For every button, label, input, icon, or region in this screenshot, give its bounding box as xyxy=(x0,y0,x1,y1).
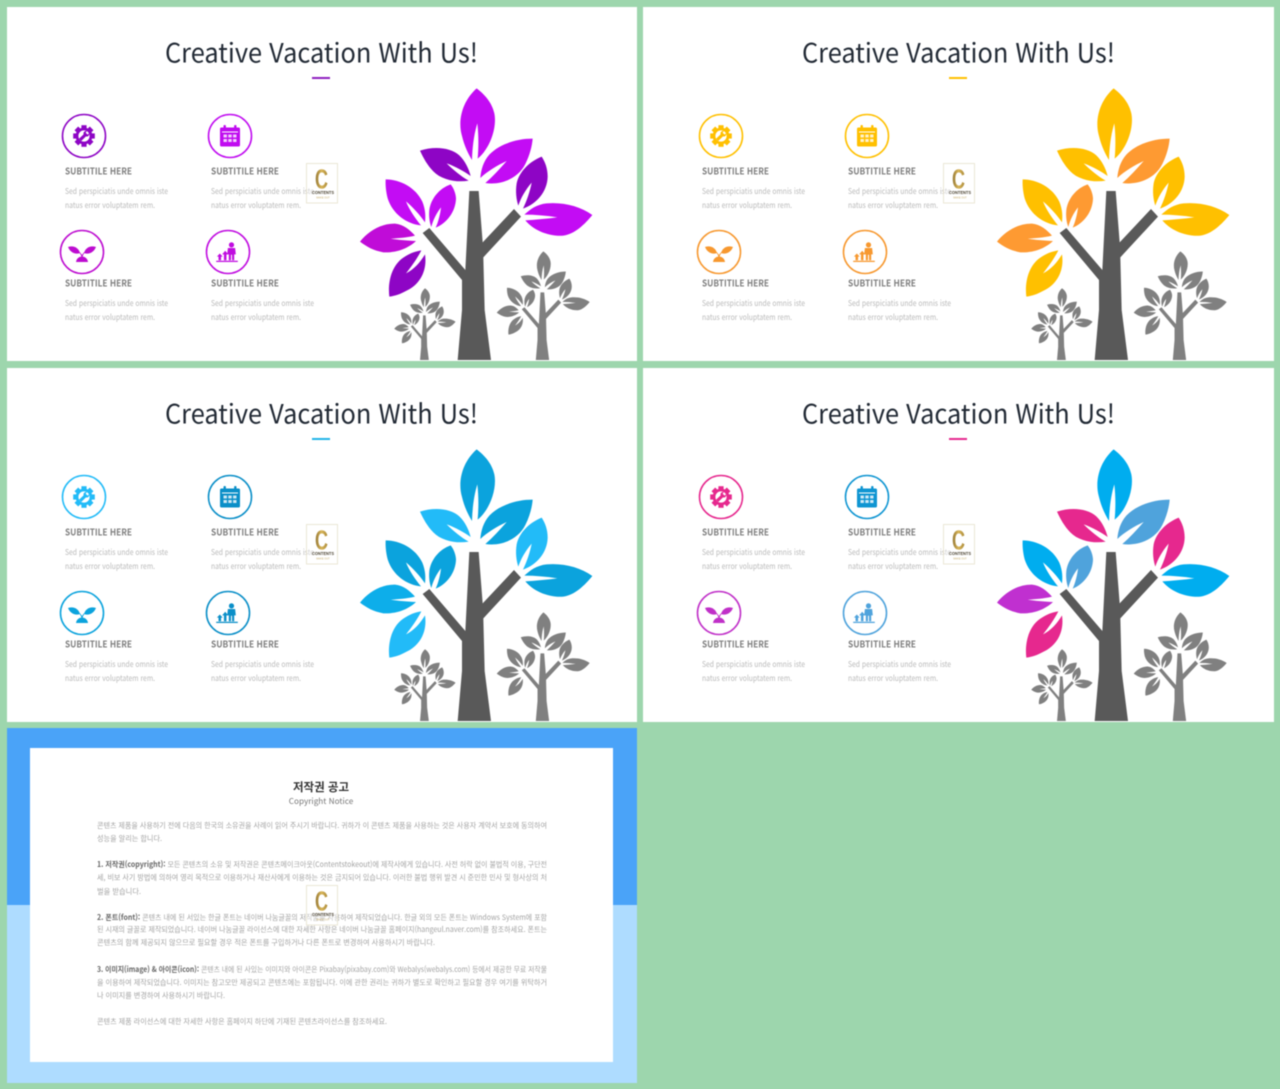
icon: calendar xyxy=(846,114,888,158)
icon: gear xyxy=(700,114,742,158)
subtitle: SUBTITILE HERE xyxy=(65,524,132,538)
notice heading: 저작권 공고 xyxy=(293,779,349,795)
feature: growth xyxy=(844,592,951,684)
description: Sed perspiciatis unde omnis iste xyxy=(702,298,805,309)
description xyxy=(211,298,314,323)
description xyxy=(848,659,951,684)
subtitle: SUBTITILE HERE xyxy=(211,164,279,178)
subtitle: SUBTITILE HERE xyxy=(211,636,279,650)
feature: sprout xyxy=(698,592,805,684)
title: Creative Vacation With Us! xyxy=(802,392,1115,432)
feature: growth xyxy=(206,230,314,323)
icon: growth person xyxy=(844,230,886,274)
subtitle: SUBTITILE HERE xyxy=(848,276,916,290)
title underline xyxy=(312,438,330,440)
description: natus error voluptatem rem. xyxy=(702,561,792,572)
section 2: font xyxy=(97,912,547,948)
subtitle: SUBTITILE HERE xyxy=(848,636,916,650)
description xyxy=(65,298,168,323)
watermark logo xyxy=(944,524,974,564)
feature: calendar xyxy=(846,114,951,211)
panel: purple slide xyxy=(7,7,637,361)
section 3: image and icon: 3. 이미지(image) & 아이콘(icon): 콘텐츠 내에 된 사있는 이미지와 아이콘은 Pixabay(pixabay.com)와 Webalys(webalys.com) 등에서 제공한 무료 저작물 xyxy=(97,964,547,975)
closing line: 콘텐츠 제품 라이선스에 대한 자세한 사항은 홈페이지 하단에 기재된 콘텐츠라이선스를 참조하세요. xyxy=(97,1016,387,1027)
description: Sed perspiciatis unde omnis iste xyxy=(211,298,314,309)
title: Creative Vacation With Us! xyxy=(165,392,478,432)
subtitle: SUBTITILE HERE xyxy=(65,636,132,650)
intro paragraph: 성능을 알리는 합니다. xyxy=(97,833,162,844)
description: natus error voluptatem rem. xyxy=(848,673,938,684)
intro paragraph: 콘텐츠 제품을 사용하기 전에 다음의 한국의 소유권을 사례이 읽어 주시기 바랍니다. 귀하가 이 콘텐츠 제품을 사용하는 것은 사용자 계약서 보호에 동의하여 xyxy=(97,820,547,831)
section 2: font: 콘텐츠의 함께 제공되지 않으므로 필요할 경우 적은 폰트를 구입하거나 다른 폰트로 변경하여 사용하시기 바랍니다. xyxy=(97,937,435,948)
feature: growth xyxy=(844,230,951,323)
description: Sed perspiciatis unde omnis iste xyxy=(211,547,314,558)
subtitle: SUBTITILE HERE xyxy=(702,636,769,650)
icon: sprout xyxy=(698,230,740,274)
icon: gear xyxy=(62,114,106,158)
notice subheading: Copyright Notice xyxy=(289,795,354,807)
description: Sed perspiciatis unde omnis iste xyxy=(848,186,951,197)
description: natus error voluptatem rem. xyxy=(65,561,155,572)
intro paragraph xyxy=(97,820,547,844)
feature: gear xyxy=(62,476,168,572)
feature: calendar xyxy=(208,114,314,211)
description: natus error voluptatem rem. xyxy=(211,673,301,684)
watermark logo xyxy=(944,164,974,203)
description: Sed perspiciatis unde omnis iste xyxy=(702,186,805,197)
description: natus error voluptatem rem. xyxy=(848,200,938,211)
tree illustration xyxy=(360,449,592,721)
description: natus error voluptatem rem. xyxy=(702,312,792,323)
description xyxy=(848,186,951,211)
feature: sprout xyxy=(698,230,805,323)
subtitle: SUBTITILE HERE xyxy=(702,524,769,538)
subtitle: SUBTITILE HERE xyxy=(211,276,279,290)
feature: growth xyxy=(206,592,314,684)
description: Sed perspiciatis unde omnis iste xyxy=(702,659,805,670)
section 3: image and icon: 나 이미지를 변경하여 사용하시기 바랍니다. xyxy=(97,990,225,1001)
subtitle: SUBTITILE HERE xyxy=(848,164,916,178)
description: natus error voluptatem rem. xyxy=(211,200,301,211)
section 2: font: 된 시재의 글꼴로 제작되었습니다. 네이버 나눔글꼴 라이선스에 대한 자세한 사항은 네이버 나눔글꼴 홈페이지(hangeul.naver.com)를 참조하세요. 폰트는 xyxy=(97,924,547,935)
section 1: copyright: 1. 저작권(copyright): 모든 콘텐츠의 소유 및 저작권은 콘텐츠메이크아웃(Contentstokeout)에 제작사에게 있습니다. 사전 허락 없이 불법적 이용, 구단전 xyxy=(97,859,547,870)
feature: calendar xyxy=(846,476,951,572)
watermark logo xyxy=(306,886,338,925)
description: natus error voluptatem rem. xyxy=(848,561,938,572)
feature: sprout xyxy=(60,230,168,323)
description: Sed perspiciatis unde omnis iste xyxy=(848,547,951,558)
panel: multicolour slide xyxy=(643,368,1274,722)
icon: growth person xyxy=(206,592,250,634)
icon: gear xyxy=(62,476,106,518)
subtitle: SUBTITILE HERE xyxy=(702,276,769,290)
subtitle: SUBTITILE HERE xyxy=(702,164,769,178)
title underline xyxy=(312,77,330,79)
icon: calendar xyxy=(846,476,888,518)
description: natus error voluptatem rem. xyxy=(211,312,301,323)
icon: calendar xyxy=(208,476,252,518)
title: Creative Vacation With Us! xyxy=(802,32,1115,70)
section 2: font: 2. 폰트(font): 콘텐츠 내에 된 서있는 한글 폰트는 네이버 나눔글꼴의 저작물을 사용하여 제작되었습니다. 한글 외의 모든 폰트는 Windows System에 포함 xyxy=(97,912,547,923)
title underline xyxy=(949,438,967,440)
description: Sed perspiciatis unde omnis iste xyxy=(65,186,168,197)
icon: sprout xyxy=(60,592,104,634)
panel: yellow slide xyxy=(643,7,1274,361)
feature: gear xyxy=(700,476,805,572)
title underline xyxy=(949,77,967,79)
section 3: image and icon: 을 이용하여 제작되었습니다. 이미지는 참고모만 제공되고 콘텐츠에는 포함됩니다. 이에 관한 권리는 귀하가 별도로 확인하고 필요할 경우 여기를 위탁하거 xyxy=(97,977,547,988)
description: natus error voluptatem rem. xyxy=(848,312,938,323)
description xyxy=(65,186,168,211)
description: Sed perspiciatis unde omnis iste xyxy=(848,659,951,670)
description xyxy=(65,547,168,572)
section 1: copyright: 벌을 받습니다. xyxy=(97,886,141,897)
subtitle: SUBTITILE HERE xyxy=(65,164,132,178)
description: natus error voluptatem rem. xyxy=(65,673,155,684)
subtitle: SUBTITILE HERE xyxy=(848,524,916,538)
icon: growth person xyxy=(844,592,886,634)
description: Sed perspiciatis unde omnis iste xyxy=(702,547,805,558)
icon: sprout xyxy=(60,230,104,274)
description: Sed perspiciatis unde omnis iste xyxy=(65,659,168,670)
description xyxy=(702,547,805,572)
description xyxy=(848,298,951,323)
icon: gear xyxy=(700,476,742,518)
icon: sprout xyxy=(698,592,740,634)
description: Sed perspiciatis unde omnis iste xyxy=(65,547,168,558)
tree illustration xyxy=(997,88,1229,360)
tree illustration xyxy=(997,449,1229,721)
section 1: copyright: 세, 비보 사기 방법에 의하여 영리 목적으로 이용하거나 재산사에게 이용하는 것은 금지되어 있습니다. 이러한 불법 행위 발견 시 준민한 민사 및 형사상의 처 xyxy=(97,872,547,883)
description xyxy=(702,298,805,323)
description xyxy=(848,547,951,572)
description xyxy=(211,186,314,211)
feature: sprout xyxy=(60,592,168,684)
description: Sed perspiciatis unde omnis iste xyxy=(211,186,314,197)
description: Sed perspiciatis unde omnis iste xyxy=(211,659,314,670)
feature: gear xyxy=(700,114,805,211)
watermark logo xyxy=(306,524,338,564)
description: natus error voluptatem rem. xyxy=(211,561,301,572)
subtitle: SUBTITILE HERE xyxy=(211,524,279,538)
description: natus error voluptatem rem. xyxy=(702,200,792,211)
description: natus error voluptatem rem. xyxy=(65,312,155,323)
description xyxy=(211,659,314,684)
icon: growth person xyxy=(206,230,250,274)
watermark logo xyxy=(306,164,338,203)
title: Creative Vacation With Us! xyxy=(165,32,478,70)
description: natus error voluptatem rem. xyxy=(702,673,792,684)
description xyxy=(211,547,314,572)
description xyxy=(65,659,168,684)
subtitle: SUBTITILE HERE xyxy=(65,276,132,290)
description: natus error voluptatem rem. xyxy=(65,200,155,211)
section 1: copyright xyxy=(97,859,547,897)
description: Sed perspiciatis unde omnis iste xyxy=(848,298,951,309)
feature: gear xyxy=(62,114,168,211)
feature: calendar xyxy=(208,476,314,572)
section 3: image and icon xyxy=(97,964,547,1001)
icon: calendar xyxy=(208,114,252,158)
panel: blue slide xyxy=(7,368,637,722)
description xyxy=(702,659,805,684)
description: Sed perspiciatis unde omnis iste xyxy=(65,298,168,309)
tree illustration xyxy=(360,88,592,360)
panel: copyright notice xyxy=(7,728,637,1083)
description xyxy=(702,186,805,211)
